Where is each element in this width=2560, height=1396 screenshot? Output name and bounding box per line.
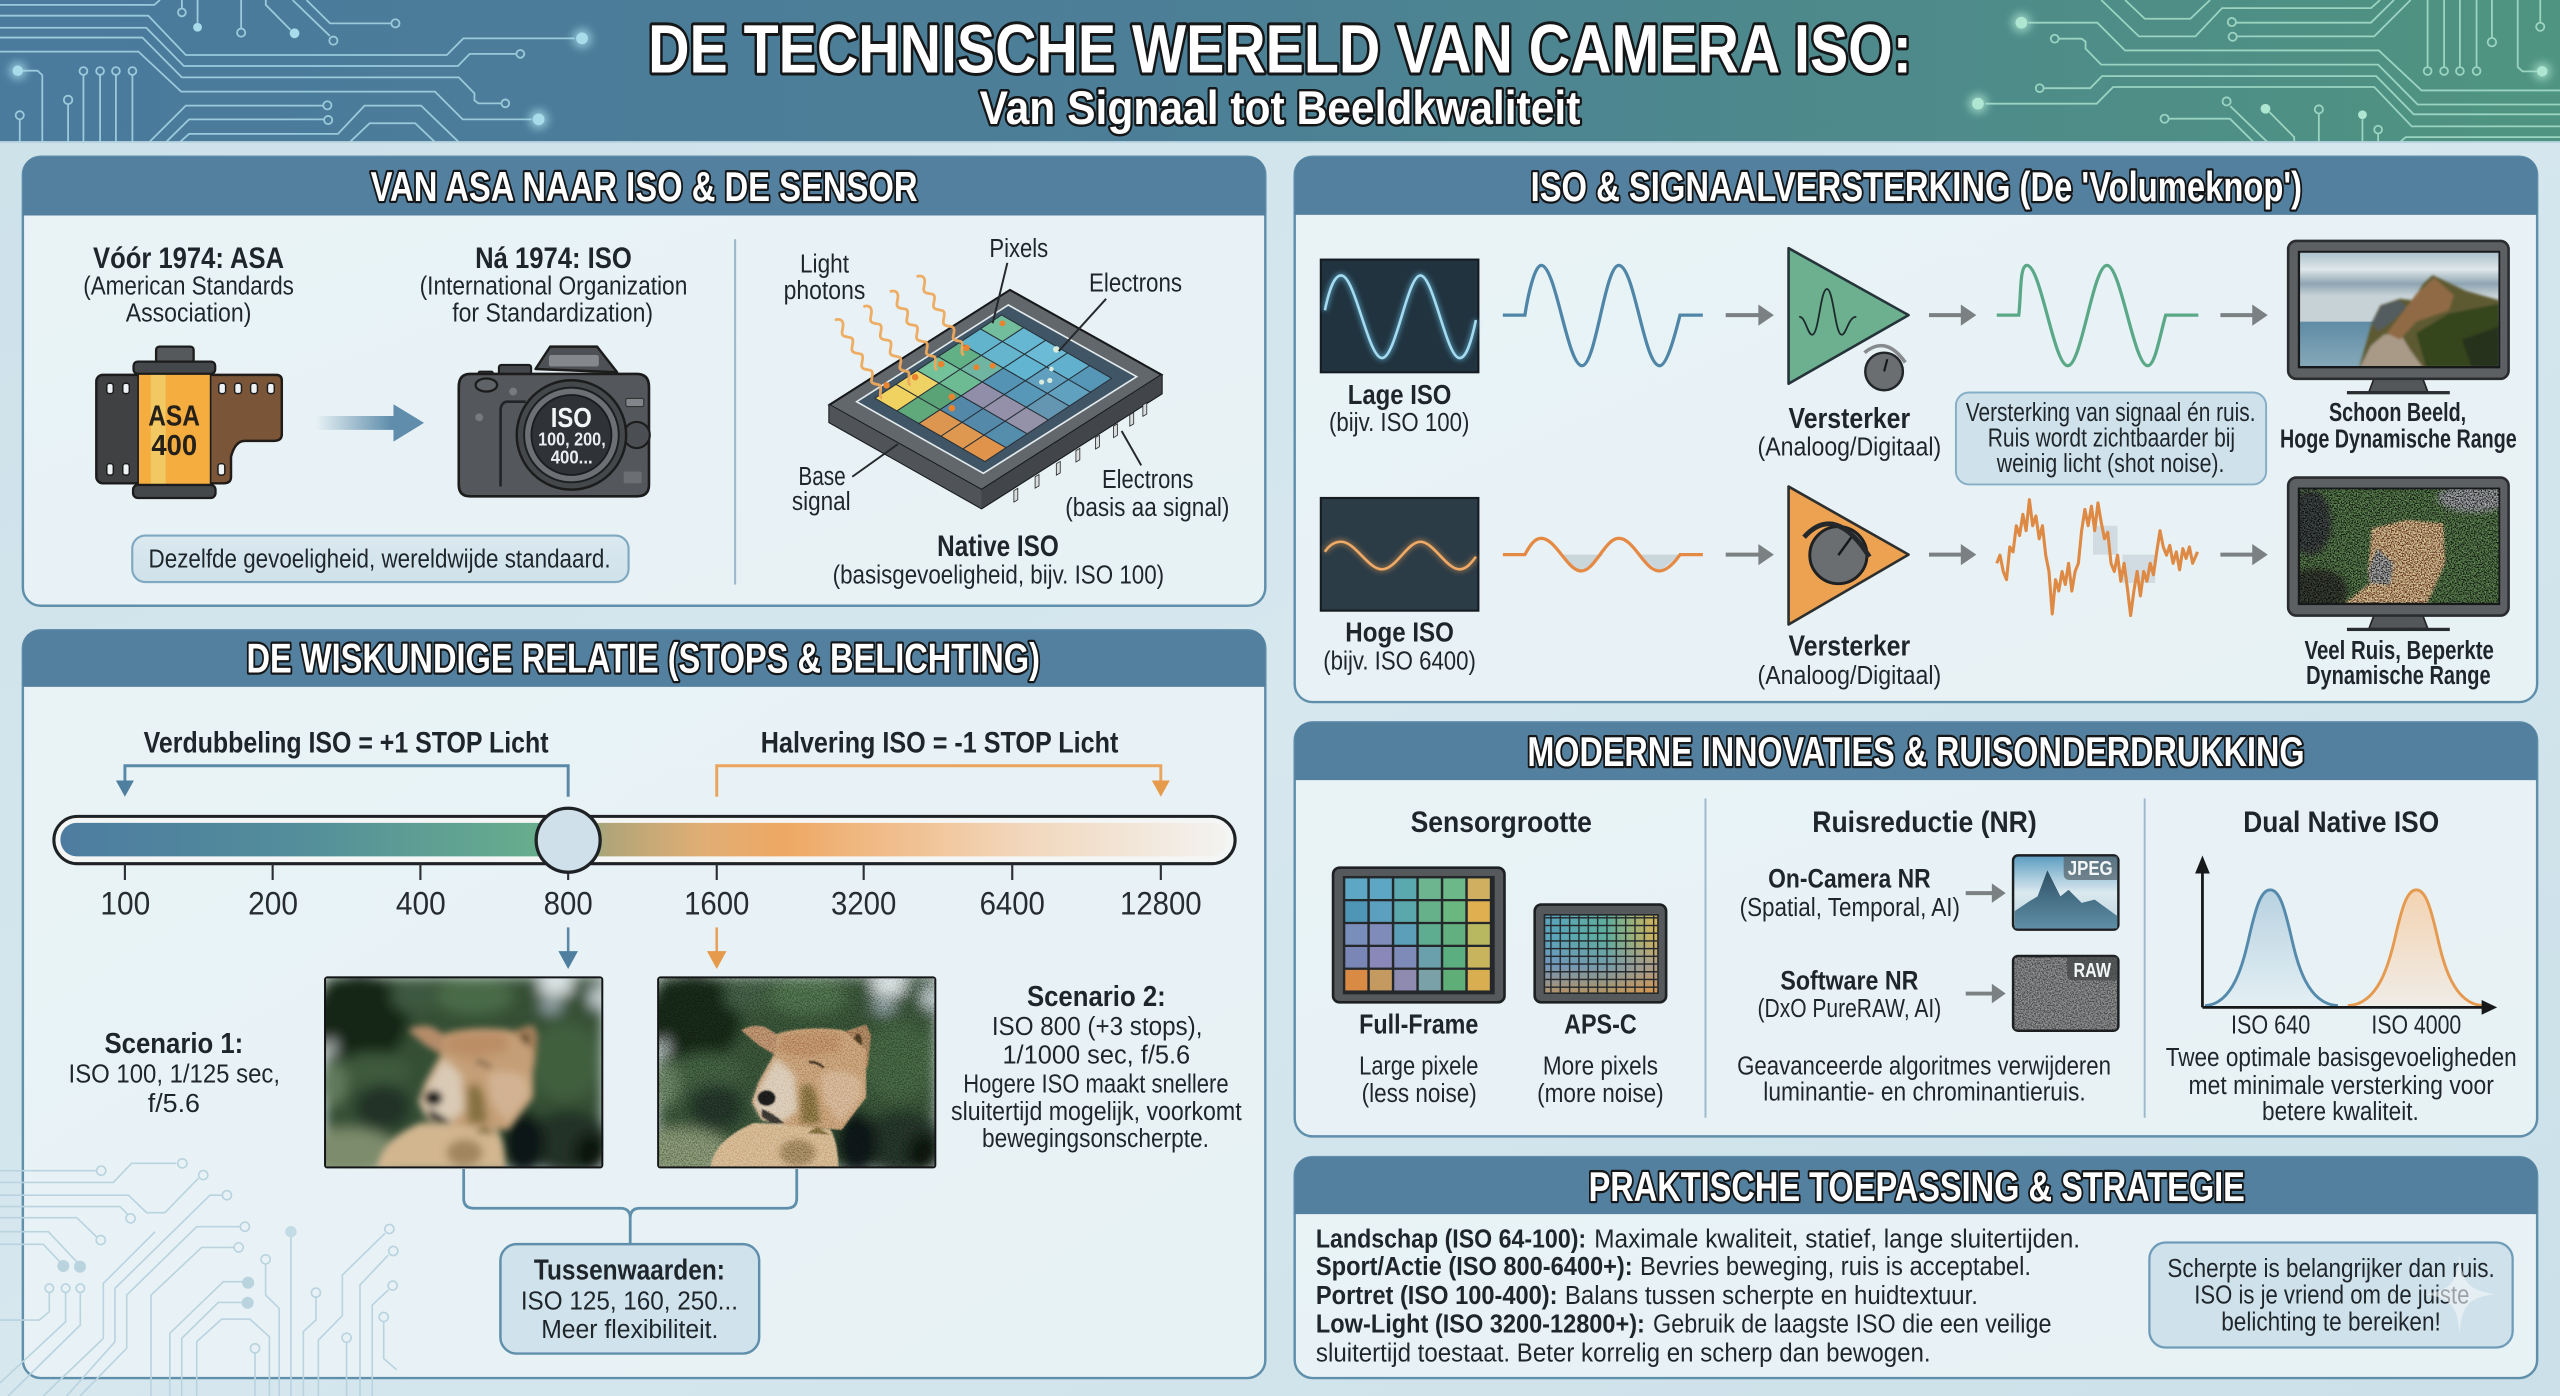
axis labels <box>2231 1012 2461 1040</box>
label: electrons basis aa signal <box>1065 466 1229 522</box>
label: base signal: Base <box>798 463 846 491</box>
arrow <box>2220 305 2268 326</box>
callout: wereldwijde standaard: Dezelfde gevoeligheid, wereldwijde standaard. <box>149 545 611 573</box>
icon: camera with ISO lens: 400... <box>551 447 593 468</box>
text: versterker bottom <box>1758 631 1941 690</box>
text: versterker top: (Analoog/Digitaal) <box>1758 434 1941 462</box>
text: scenario 2: Scenario 2: <box>1027 981 1166 1013</box>
heading: praktische toepassing: PRAKTISCHE TOEPASSING & STRATEGIE <box>1589 1163 2245 1210</box>
text: versterker top: Versterker <box>1789 403 1910 435</box>
text: APS-C: More pixels <box>1543 1052 1658 1080</box>
arrow: orange bracket to 12800 <box>717 766 1170 797</box>
text: APS-C: (more noise) <box>1537 1080 1664 1108</box>
callout: signaal en ruis: Ruis wordt zichtbaarder bij <box>1988 425 2235 453</box>
text: scenario 2: Hogere ISO maakt snellere <box>963 1070 1229 1098</box>
text: lage ISO: Lage ISO <box>1348 379 1451 410</box>
label: light photons <box>784 251 865 305</box>
axis labels: ISO 640 <box>2231 1012 2310 1040</box>
icon: monitor with clean landscape <box>2288 241 2509 394</box>
tick labels: 3200 <box>831 884 896 921</box>
label: light photons: photons <box>784 277 865 305</box>
callout: tussenwaarden: Meer flexibiliteit. <box>541 1316 718 1344</box>
arrow: 1600 to scenario 2 <box>707 927 727 969</box>
text: dual native uitleg: Twee optimale basisgevoeligheden <box>2166 1044 2517 1072</box>
chart: noisy amplified signal <box>1997 500 2198 616</box>
text: strategie lijst <box>1316 1225 2080 1368</box>
heading: dual native ISO: Dual Native ISO <box>2243 806 2439 839</box>
text: strategie lijst: Low-Light (ISO 3200-12800+): <box>1316 1310 1645 1338</box>
text: full-frame: Large pixele <box>1359 1052 1478 1080</box>
text: veel ruis: Dynamische Range <box>2306 662 2491 690</box>
icon: sparkle <box>2424 1254 2495 1334</box>
icon: full-frame sensor grid <box>1333 868 1504 1002</box>
text: software NR: Software NR <box>1780 965 1918 995</box>
icon: camera with ISO lens: 100, 200, <box>538 429 606 450</box>
icon: film canister ASA 400: 400 <box>151 430 197 462</box>
callout: scherpte: belichting te bereiken! <box>2221 1309 2441 1337</box>
text: scenario 1: ISO 100, 1/125 sec, <box>69 1061 280 1089</box>
icon: green amplifier with small knob <box>1789 248 1909 390</box>
text: strategie lijst: Maximale kwaliteit, statief, lange sluitertijden. <box>1594 1225 2080 1253</box>
panel: signaalversterking <box>1295 157 2537 702</box>
icon: sensor chip with photons <box>829 263 1162 508</box>
arrow <box>1726 305 1774 326</box>
arrow <box>1929 544 1976 565</box>
text: na 1974 ISO: for Standardization) <box>452 300 653 328</box>
text: native ISO <box>833 530 1164 590</box>
text: APS-C: APS-C <box>1564 1009 1637 1040</box>
text: voor 1974 ASA <box>83 242 294 328</box>
text: strategie lijst: Sport/Actie (ISO 800-6400+): <box>1316 1253 1633 1281</box>
icon: camera with ISO lens <box>459 347 650 496</box>
callout: tussenwaarden: ISO 125, 160, 250... <box>521 1287 738 1315</box>
arrow: ASA to ISO <box>315 404 424 442</box>
tick labels: 400 <box>396 884 446 921</box>
text: hoge ISO: Hoge ISO <box>1345 617 1454 648</box>
tick labels: 200 <box>248 884 298 921</box>
icon: JPEG thumbnail <box>2013 855 2118 930</box>
label: pixels: Pixels <box>989 235 1048 263</box>
connector bracket <box>464 1169 797 1244</box>
text: on-camera NR <box>1740 863 1960 922</box>
icon: orange amplifier with large knob <box>1789 487 1909 625</box>
text: voor 1974 ASA: (American Standards <box>83 273 294 301</box>
arrow <box>1966 984 2006 1003</box>
text: on-camera NR: (Spatial, Temporal, AI) <box>1740 894 1960 922</box>
text: hoge ISO: (bijv. ISO 6400) <box>1323 647 1476 675</box>
text: strategie lijst: Balans tussen scherpte en huidtextuur. <box>1565 1282 1978 1310</box>
panel: wiskundige relatie <box>0 630 1265 1396</box>
text: lage ISO <box>1329 379 1469 437</box>
oscilloscope: lage ISO <box>1321 260 1478 372</box>
text: versterker bottom: (Analoog/Digitaal) <box>1758 662 1941 690</box>
tick labels: 12800 <box>1120 884 1202 921</box>
label: light photons: Light <box>800 251 849 279</box>
heading: ruisreductie: Ruisreductie (NR) <box>1812 806 2037 839</box>
callout: scherpte: ISO is je vriend om de juiste <box>2194 1282 2469 1310</box>
panel: moderne innovaties <box>1295 722 2537 1136</box>
text: ruisreductie uitleg: Geavanceerde algoritmes verwijderen <box>1737 1052 2111 1080</box>
text: software NR: (DxO PureRAW, AI) <box>1758 995 1941 1023</box>
text: strategie lijst: Landschap (ISO 64-100): <box>1316 1225 1586 1253</box>
text: hoge ISO <box>1323 617 1476 675</box>
label: halvering ISO: Halvering ISO = -1 STOP Licht <box>761 727 1119 760</box>
callout: tussenwaarden: Tussenwaarden: <box>534 1254 725 1286</box>
background circuit pattern <box>0 1159 398 1396</box>
text: versterker bottom: Versterker <box>1789 631 1910 663</box>
text: strategie lijst: Gebruik de laagste ISO die een veilige <box>1653 1310 2051 1338</box>
chart: clean input signal <box>1503 265 1703 366</box>
text: APS-C <box>1537 1009 1664 1108</box>
text: ruisreductie uitleg <box>1737 1052 2111 1106</box>
arrow: blue bracket to 100 <box>116 766 568 797</box>
heading: moderne innovaties: MODERNE INNOVATIES & RUISONDERDRUKKING <box>1527 728 2304 775</box>
text: native ISO: (basisgevoeligheid, bijv. ISO 100) <box>833 562 1164 590</box>
text: dual native uitleg: betere kwaliteit. <box>2262 1098 2419 1126</box>
icon: film canister ASA 400: ASA <box>148 400 200 432</box>
chart: weak input signal <box>1503 538 1703 571</box>
arrow <box>1726 544 1774 565</box>
text: voor 1974 ASA: Vóór 1974: ASA <box>93 242 284 275</box>
text: strategie lijst: Portret (ISO 100-400): <box>1316 1282 1558 1310</box>
arrow: 800 to scenario 1 <box>558 927 578 969</box>
header banner <box>0 0 2560 143</box>
icon: film canister ASA 400 <box>96 347 282 498</box>
icon: RAW thumbnail <box>2013 956 2118 1031</box>
icon: JPEG thumbnail: JPEG <box>2068 858 2113 880</box>
photo: sharp dog <box>657 976 936 1168</box>
text: versterker top <box>1758 403 1941 462</box>
label: base signal: signal <box>792 488 851 516</box>
tick labels: 1600 <box>684 884 749 921</box>
label: electrons: Electrons <box>1089 269 1182 297</box>
text: scenario 1: Scenario 1: <box>104 1028 243 1060</box>
tick labels <box>100 884 1202 921</box>
text: full-frame: Full-Frame <box>1359 1009 1478 1040</box>
text: veel ruis <box>2304 637 2494 690</box>
text: on-camera NR: On-Camera NR <box>1768 863 1931 893</box>
chart: amplified clean signal <box>1997 265 2198 366</box>
text: full-frame: (less noise) <box>1362 1080 1477 1108</box>
text: strategie lijst: Bevries beweging, ruis is acceptabel. <box>1640 1253 2031 1281</box>
callout: signaal en ruis: weinig licht (shot noise). <box>1996 450 2224 478</box>
text: lage ISO: (bijv. ISO 100) <box>1329 409 1469 437</box>
heading: wiskundige relatie: DE WISKUNDIGE RELATIE (STOPS & BELICHTING) <box>247 635 1040 682</box>
panel: praktische toepassing <box>1295 1157 2537 1378</box>
text: full-frame <box>1359 1009 1478 1108</box>
text: veel ruis: Veel Ruis, Beperkte <box>2304 637 2494 665</box>
label: electrons basis aa signal: (basis aa signal) <box>1065 494 1229 522</box>
text: native ISO: Native ISO <box>937 530 1059 563</box>
text: ruisreductie uitleg: luminantie- en chrominantieruis. <box>1763 1078 2086 1106</box>
photo: blurred dog <box>324 976 604 1168</box>
tick labels: 800 <box>544 884 593 921</box>
title: DE TECHNISCHE WERELD VAN CAMERA ISO: <box>648 11 1912 88</box>
text: scenario 2: sluitertijd mogelijk, voorkomt <box>951 1098 1242 1126</box>
icon: APS-C sensor grid <box>1535 905 1666 1002</box>
heading: signaalversterking: ISO & SIGNAALVERSTERKING (De 'Volumeknop') <box>1531 163 2302 210</box>
text: scenario 2: bewegingsonscherpte. <box>982 1125 1209 1153</box>
arrow <box>1929 305 1976 326</box>
label: base signal <box>792 463 851 516</box>
text: scenario 2 <box>951 981 1242 1153</box>
arrow <box>2220 544 2268 565</box>
chart: ISO scale slider <box>54 808 1235 921</box>
heading: sensorgrootte: Sensorgrootte <box>1411 806 1592 839</box>
callout: signaal en ruis: Versterking van signaal én ruis. <box>1966 399 2256 427</box>
axis labels: ISO 4000 <box>2371 1012 2461 1040</box>
tick labels: 6400 <box>980 884 1045 921</box>
subtitle: Van Signaal tot Beeldkwaliteit <box>980 82 1581 135</box>
text: strategie lijst: sluitertijd toestaat. Beter korrelig en scherp dan bewogen. <box>1316 1340 1931 1368</box>
tick labels: 100 <box>100 884 150 921</box>
callout: tussenwaarden <box>500 1244 759 1354</box>
label: electrons basis aa signal: Electrons <box>1102 466 1193 494</box>
icon: monitor with noisy dog <box>2282 478 2509 631</box>
text: dual native uitleg <box>2166 1044 2517 1126</box>
text: scenario 1 <box>69 1028 280 1118</box>
text: na 1974 ISO: Ná 1974: ISO <box>475 242 632 275</box>
callout: scherpte: Scherpte is belangrijker dan ruis. <box>2167 1255 2495 1283</box>
text: scenario 1: f/5.6 <box>148 1090 200 1118</box>
label: verdubbeling ISO: Verdubbeling ISO = +1 STOP Licht <box>144 727 549 760</box>
text: na 1974 ISO <box>420 242 687 328</box>
text: scenario 2: 1/1000 sec, f/5.6 <box>1002 1042 1190 1070</box>
heading: van ASA naar ISO: VAN ASA NAAR ISO & DE SENSOR <box>371 163 918 210</box>
text: voor 1974 ASA: Association) <box>126 300 251 328</box>
icon: RAW thumbnail: RAW <box>2073 960 2112 982</box>
text: software NR <box>1758 965 1941 1023</box>
panel: van ASA naar ISO en de sensor <box>23 157 1265 606</box>
text: schoon beeld <box>2280 399 2517 453</box>
callout: scherpte <box>2149 1243 2513 1348</box>
text: na 1974 ISO: (International Organization <box>420 273 687 301</box>
arrow <box>1966 883 2006 903</box>
chart: dual native ISO curves <box>2195 856 2497 1040</box>
callout: signaal en ruis <box>1956 393 2266 484</box>
icon: camera with ISO lens: ISO <box>551 402 592 433</box>
callout: wereldwijde standaard <box>132 536 629 582</box>
oscilloscope: hoge ISO <box>1321 498 1478 611</box>
text: scenario 2: ISO 800 (+3 stops), <box>992 1013 1202 1041</box>
text: schoon beeld: Schoon Beeld, <box>2329 399 2466 427</box>
text: dual native uitleg: met minimale versterking voor <box>2189 1072 2494 1100</box>
